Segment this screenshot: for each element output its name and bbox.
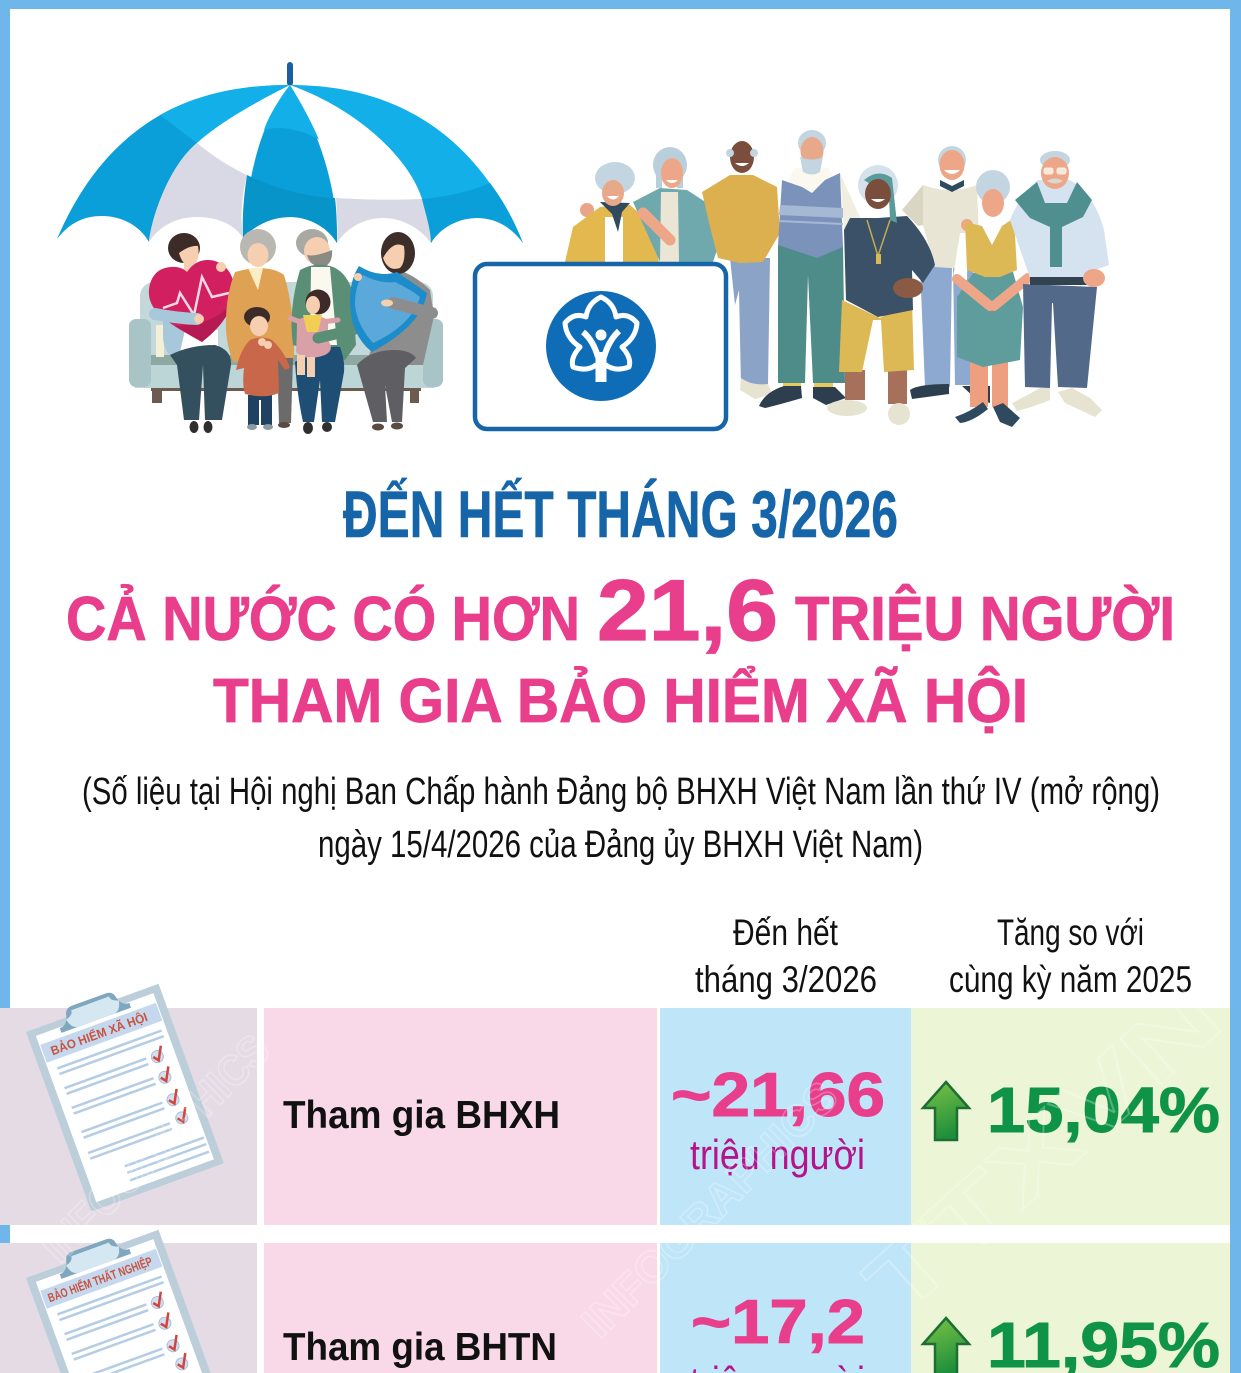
value: 21,66 million people — [671, 1061, 885, 1178]
watermark — [32, 966, 1240, 1347]
grandfather — [292, 229, 356, 434]
illustration: group of elderly people — [565, 130, 1109, 427]
elder woman dark blouse — [827, 165, 935, 425]
logo box — [475, 264, 726, 429]
person 1 with heart — [149, 233, 234, 433]
clipboard icon: BHXH: BẢO HIỂM XÃ HỘI — [48, 1009, 149, 1058]
column header: up to March 2026: Đến hết — [733, 912, 839, 953]
title line 1: ĐẾN HẾT THÁNG 3/2026 — [343, 477, 898, 551]
title line 2: CẢ NƯỚC CÓ HƠN — [66, 585, 580, 654]
elder woman yellow vest and teal skirt — [953, 170, 1031, 427]
elder man cream sweater — [902, 146, 990, 403]
subtitle — [82, 771, 1160, 866]
title line 2 — [66, 563, 1175, 659]
value: 21,66 million people: triệu người — [690, 1131, 865, 1178]
value: 15,04%: 15,04% — [987, 1074, 1220, 1146]
watermark: INFOGRAPHICS — [32, 1025, 279, 1272]
column header: increase vs same period 2025: Tăng so với — [997, 912, 1144, 953]
value: 21,66 million people: ~21,66 — [671, 1061, 885, 1130]
column header: increase vs same period 2025 — [949, 912, 1192, 1000]
subtitle: ngày 15/4/2026 của Đảng ủy BHXH Việt Nam) — [318, 824, 923, 866]
title line 3: THAM GIA BẢO HIỂM XÃ HỘI — [213, 667, 1028, 736]
clipboard icon: BHXH — [23, 975, 224, 1211]
illustration: family on sofa — [129, 229, 443, 434]
elder man blue vest — [759, 130, 862, 408]
clipboard icon: BHTN: BẢO HIỂM THẤT NGHIỆP — [46, 1253, 154, 1305]
watermark: TTXVN — [846, 966, 1240, 1335]
elder woman teal jacket — [633, 147, 718, 262]
title line 2: 21,6 — [597, 563, 778, 659]
girl — [290, 290, 353, 377]
clipboard icon: BHTN — [23, 1221, 224, 1373]
column header: up to March 2026: tháng 3/2026 — [695, 959, 877, 1000]
grandmother — [226, 229, 294, 428]
table row 1: BHXH — [0, 975, 1230, 1225]
illustration: umbrella — [57, 62, 523, 243]
icon: BHXH logo — [546, 291, 656, 401]
icon: up arrow — [923, 1082, 969, 1140]
icon: up arrow — [923, 1318, 969, 1373]
right frame strip over rows — [1230, 1000, 1241, 1373]
title line 2: TRIỆU NGƯỜI — [795, 585, 1175, 654]
label: Tham gia BHXH: Tham gia BHXH — [283, 1094, 560, 1137]
elder man with teal sweater on shoulders — [1010, 151, 1109, 417]
elder man yellow sweater — [702, 141, 780, 399]
label: Tham gia BHTN: Tham gia BHTN — [283, 1326, 557, 1369]
column header: up to March 2026 — [695, 912, 877, 1000]
value: 17,2 million people: ~17,2 — [691, 1288, 865, 1357]
woman with shield — [350, 232, 434, 430]
elder woman yellow cardigan — [565, 162, 659, 262]
watermark: INFOGRAPHICS — [572, 1072, 847, 1347]
boy — [236, 307, 290, 430]
table row 2: BHTN — [0, 1221, 1230, 1373]
